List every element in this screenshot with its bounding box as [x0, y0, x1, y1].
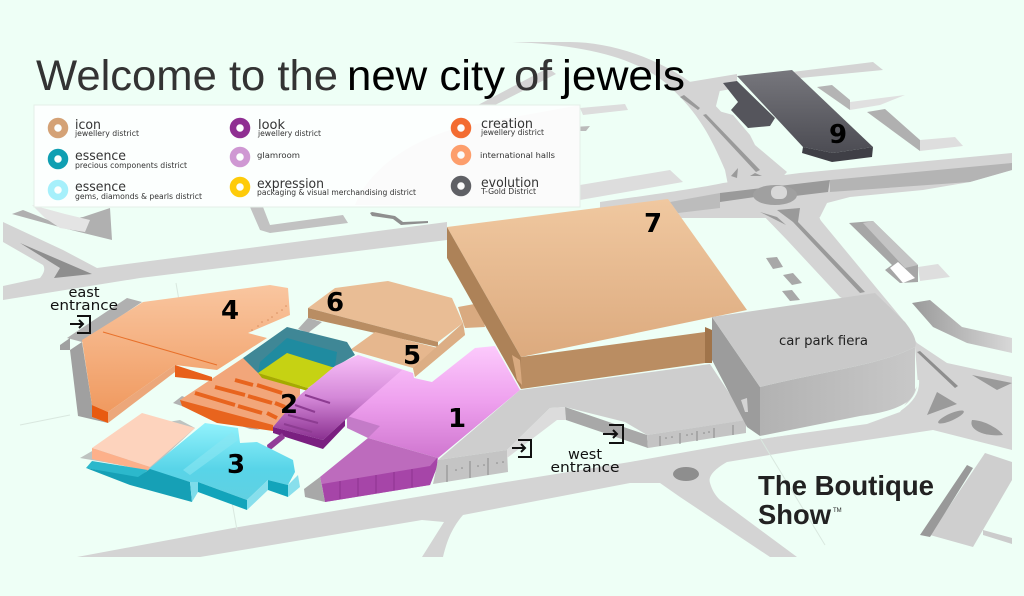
west entrance label: west — [568, 447, 602, 463]
east entrance label: east — [68, 285, 100, 301]
roundabout top — [753, 185, 797, 205]
legend: evolution — [454, 175, 539, 196]
building 6 and 5 — [298, 281, 465, 377]
legend: expression — [233, 176, 416, 197]
building 7 — [447, 199, 747, 389]
faint ground lines — [20, 283, 825, 545]
legend: look: look — [258, 117, 285, 133]
legend: icon — [51, 117, 139, 138]
logo: The Boutique Show — [758, 470, 934, 530]
logo: The Boutique Show: Show — [758, 499, 832, 530]
car park — [712, 293, 918, 438]
title: jewels — [560, 52, 685, 100]
legend: icon: icon — [75, 117, 101, 133]
building 1 stepped section — [267, 355, 402, 452]
legend: look — [233, 117, 321, 138]
west entrance building — [433, 364, 747, 484]
legend: icon: jewellery district — [74, 129, 139, 138]
yellow block — [258, 353, 335, 391]
building numbers: 9 — [829, 120, 847, 150]
legend: glamroom: glamroom — [257, 151, 300, 160]
legend: creation: jewellery district — [480, 128, 544, 137]
logo: The Boutique Show: The Boutique — [758, 470, 934, 501]
title — [36, 52, 685, 100]
building numbers: 1 — [448, 404, 466, 434]
building 2 orange — [173, 358, 300, 431]
title: of — [514, 52, 553, 100]
title: new city — [347, 52, 505, 100]
legend: creation — [454, 116, 544, 137]
building numbers: 2 — [280, 390, 298, 420]
legend: essence precious: essence — [75, 148, 126, 164]
legend: look: jewellery district — [257, 129, 321, 138]
legend: essence gems: gems, diamonds & pearls district — [75, 192, 202, 201]
car park label: car park fiera — [779, 333, 868, 349]
building numbers: 5 — [403, 341, 421, 371]
east entrance label — [50, 285, 118, 314]
icon: west entrance arrow 1 — [512, 440, 531, 457]
building 4 — [60, 285, 290, 423]
east entrance label: entrance — [50, 298, 118, 314]
legend: international halls: international halls — [480, 151, 555, 160]
building 9 — [723, 70, 873, 162]
legend: evolution: T-Gold District — [480, 187, 536, 196]
icon: east entrance arrow — [70, 316, 90, 333]
building numbers: 6 — [326, 288, 344, 318]
west entrance label: entrance — [550, 460, 620, 476]
legend: expression: packaging & visual merchandising district — [257, 188, 416, 197]
icon: west entrance arrow 2 — [603, 425, 623, 443]
building numbers: 3 — [227, 450, 245, 480]
teal block — [243, 327, 355, 373]
building 1 — [300, 346, 522, 502]
legend: expression: expression — [257, 176, 324, 192]
roundabout bottom — [673, 467, 699, 481]
building 3 — [80, 413, 300, 510]
legend: international halls — [454, 148, 555, 162]
logo: The Boutique Show: TM — [833, 508, 842, 514]
building numbers: 7 — [644, 209, 662, 239]
legend panel — [34, 105, 580, 207]
legend: essence precious: precious components district — [75, 161, 187, 170]
legend: essence gems — [51, 179, 202, 201]
ramps — [670, 163, 1012, 213]
legend: evolution: evolution — [481, 175, 539, 191]
title: Welcome to the — [36, 52, 338, 100]
road islands and underpass — [20, 95, 1012, 435]
legend: essence gems: essence — [75, 179, 126, 195]
legend: essence precious — [51, 148, 187, 170]
west entrance label — [550, 447, 620, 476]
building numbers: 4 — [221, 296, 239, 326]
building numbers — [221, 120, 847, 480]
legend: creation: creation — [481, 116, 533, 132]
legend: glamroom — [233, 150, 300, 164]
surrounding buildings — [12, 85, 1012, 547]
legend background shape — [355, 105, 580, 207]
